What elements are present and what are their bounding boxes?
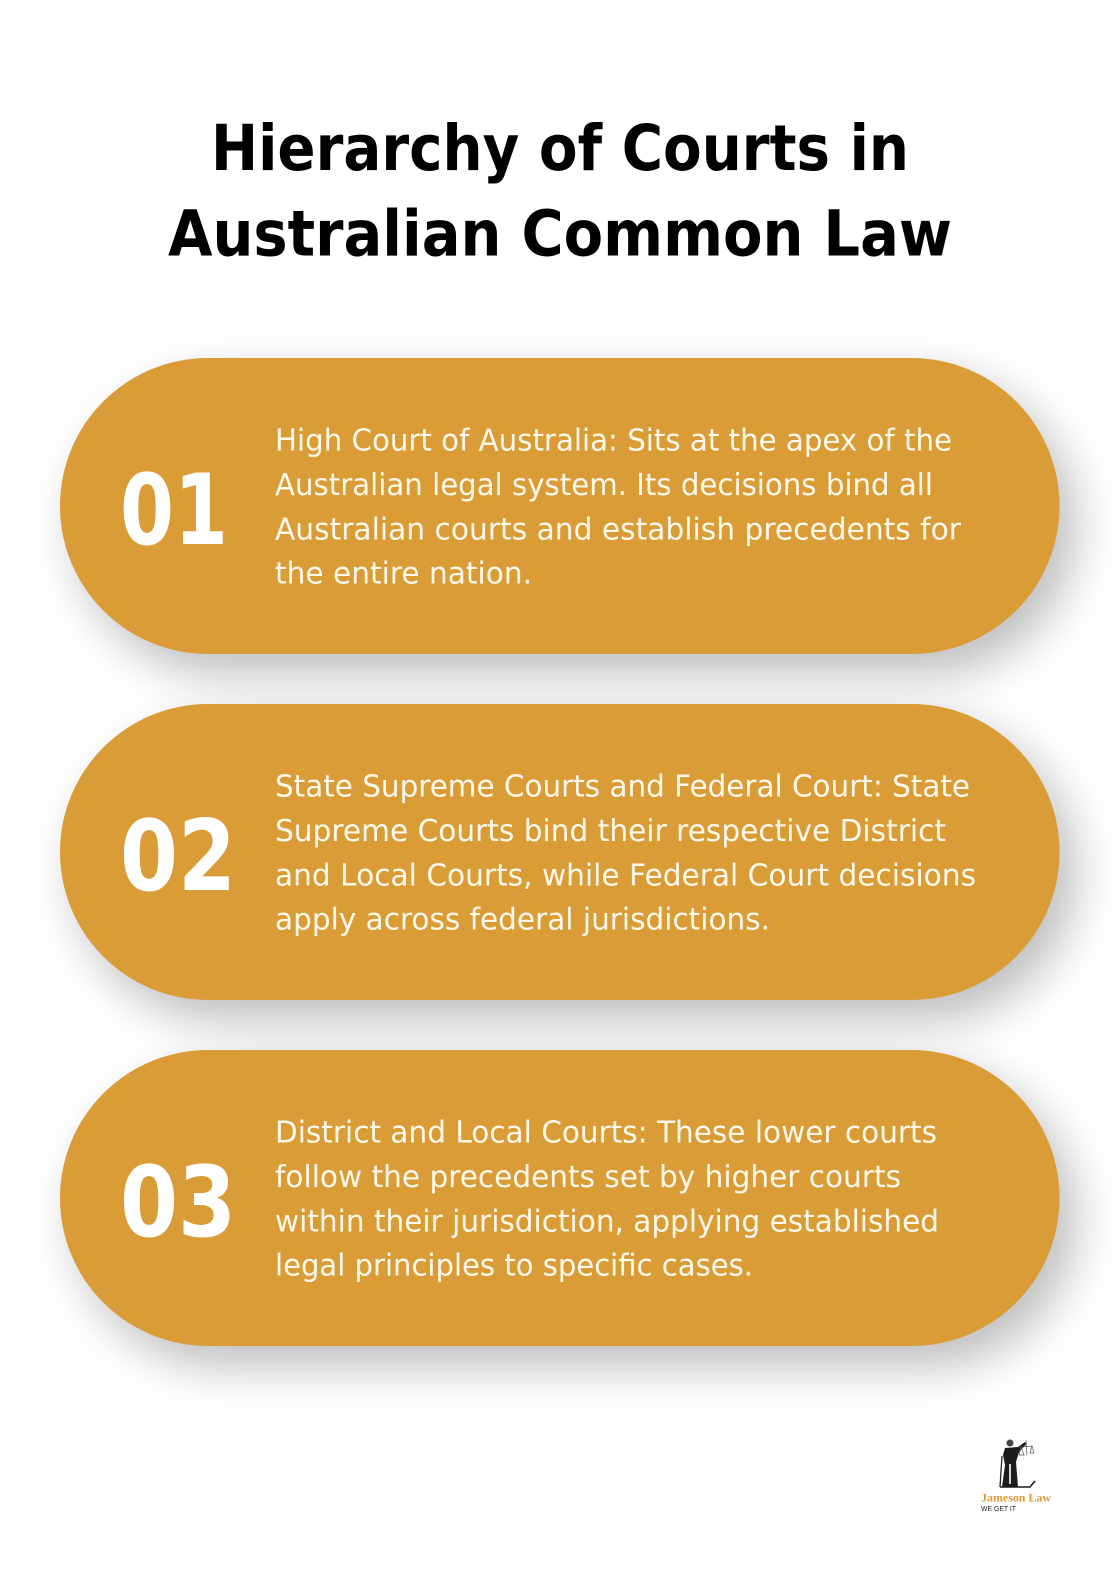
title: Hierarchy of Courts in	[211, 112, 909, 185]
number 02: 02	[120, 800, 236, 914]
panel: step 01	[60, 358, 1076, 674]
text: District and Local Courts: legal principles to specific cases.	[275, 1248, 753, 1283]
number 03: 03	[120, 1146, 236, 1260]
text: High Court: Australian legal system. Its decisions bind all	[275, 468, 933, 503]
icon: lady justice	[1000, 1440, 1035, 1487]
logo name: Jameson Law	[981, 1491, 1051, 1505]
panel: step 02	[60, 704, 1076, 1020]
text: State Supreme Courts: apply across federal jurisdictions.	[275, 902, 770, 937]
panel: step 03	[60, 1050, 1076, 1366]
text: High Court: High Court of Australia: Sits at the apex of the	[275, 424, 952, 459]
text: High Court: Australian courts and establish precedents for	[275, 512, 962, 547]
logo: Jameson Law	[981, 1440, 1051, 1513]
text: State Supreme Courts: Supreme Courts bind their respective District	[275, 814, 946, 849]
text: State Supreme Courts	[275, 770, 976, 937]
number 01: 01	[120, 454, 228, 568]
text: District and Local Courts: District and Local Courts: These lower courts	[275, 1116, 937, 1151]
title: Australian Common Law	[168, 198, 952, 270]
text: High Court: the entire nation.	[275, 556, 532, 591]
title	[168, 112, 952, 270]
text: District and Local Courts: follow the precedents set by higher courts	[275, 1160, 901, 1195]
text: District and Local Courts	[275, 1116, 939, 1283]
text: State Supreme Courts: and Local Courts, while Federal Court decisions	[275, 858, 976, 893]
text: State Supreme Courts: State Supreme Courts and Federal Court: State	[275, 770, 970, 805]
logo tagline: WE GET IT	[981, 1504, 1016, 1513]
text: District and Local Courts: within their jurisdiction, applying established	[275, 1204, 939, 1239]
text: High Court	[275, 424, 962, 591]
